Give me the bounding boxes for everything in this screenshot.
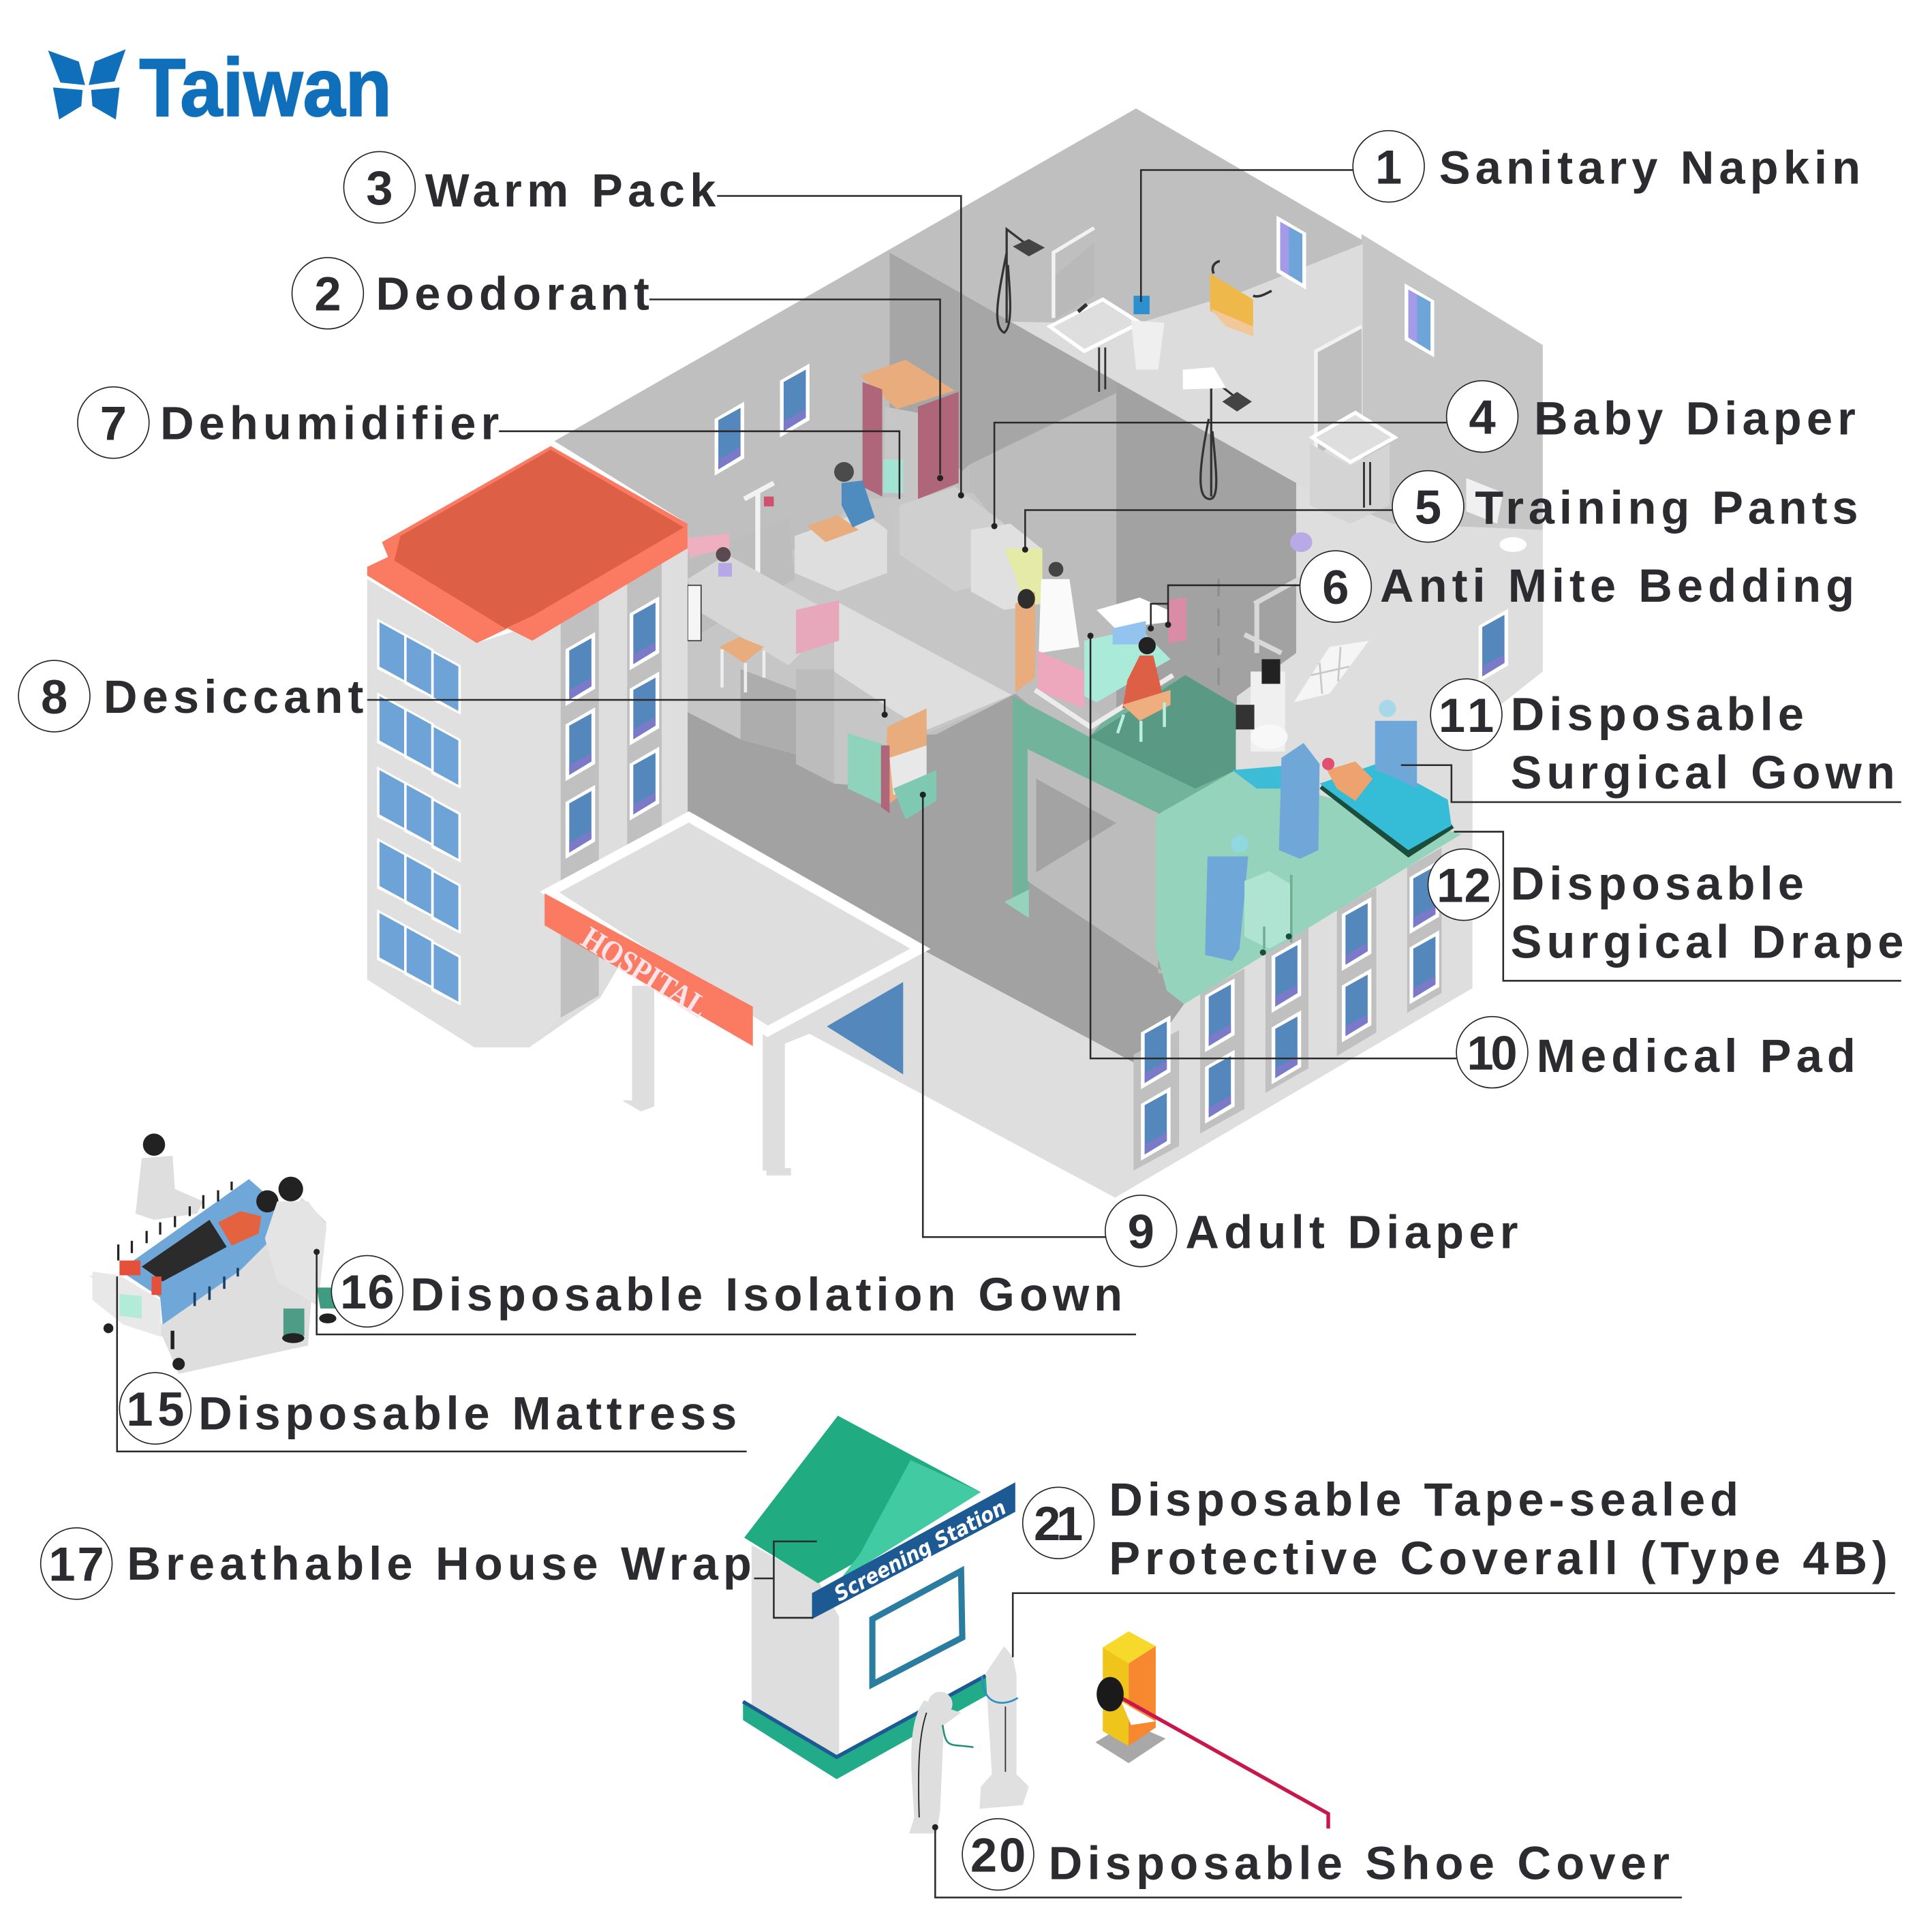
callout 7: Dehumidifier (78, 387, 900, 499)
nurse gown (136, 1156, 203, 1220)
number badge: 21 (1034, 1497, 1083, 1550)
leader line (923, 796, 1107, 1237)
sink two (1310, 444, 1390, 523)
callout 16: Disposable Isolation Gown (313, 1248, 1136, 1334)
label text: Disposable (1511, 688, 1804, 740)
door frame (1028, 749, 1165, 973)
shower one (997, 229, 1032, 333)
IV stand (744, 483, 773, 579)
exterior lower wall (767, 834, 1473, 1197)
instrument table (1232, 764, 1313, 788)
leader line (317, 1253, 1136, 1334)
callout 15: Disposable Mattress (117, 1276, 747, 1452)
patient torso (218, 1211, 261, 1246)
surgeon B (1379, 700, 1396, 717)
illustration: bathroom fixtures (997, 229, 1527, 690)
maternity bed (1015, 592, 1035, 692)
callout 5: Training Pants (1022, 471, 1858, 553)
number badge (1430, 679, 1502, 750)
toilet two (1467, 478, 1503, 523)
illustration: ward rooms with furniture and people (684, 360, 1186, 819)
number badge (1447, 381, 1518, 453)
barrier arm (1121, 1698, 1328, 1828)
illustration: stretcher scene (89, 1133, 337, 1374)
canopy roof (549, 817, 921, 1031)
number badge: 7 (100, 396, 127, 450)
label text: Adult Diaper (1185, 1206, 1518, 1259)
monitors (1251, 671, 1285, 752)
leader line (367, 700, 885, 715)
number badge (1353, 131, 1424, 202)
ceiling arm (1244, 577, 1304, 653)
label text: Disposable Mattress (198, 1387, 737, 1439)
booth base (743, 1676, 996, 1779)
floor and gowns (89, 1197, 326, 1374)
leader line (649, 299, 940, 474)
callout 12: Disposable Surgical Drape: Surgical Drape (1511, 916, 1903, 968)
leader line (1454, 831, 1901, 981)
number badge: 10 (1467, 1026, 1518, 1079)
barrier gap (1121, 1702, 1156, 1725)
worker in coverall right (979, 1646, 1029, 1809)
label text: Deodorant (375, 268, 649, 320)
worker in coverall left (909, 1700, 961, 1833)
number badge: 11 (1439, 688, 1494, 742)
illustration: operating room (1205, 641, 1454, 961)
tower left windows (377, 619, 461, 1005)
number badge (1428, 849, 1499, 921)
wardrobe curtains (863, 382, 883, 497)
callout 21: Disposable Tape-sealed Protective Coverall (Type 4B): Protective Coverall (Type 4B) (1109, 1532, 1888, 1584)
upper bathroom floor and divider (1011, 244, 1363, 523)
callout 10: Medical Pad (1088, 632, 1856, 1088)
barrier post (1103, 1631, 1156, 1663)
towel (1210, 273, 1253, 337)
callout 8: Desiccant (18, 660, 888, 732)
dark partition walls (889, 253, 1116, 471)
number badge: 20 (970, 1828, 1026, 1882)
leader line (499, 431, 900, 499)
surgeon C (1231, 835, 1248, 853)
back wall windows (715, 215, 1435, 476)
operating table (1319, 784, 1454, 857)
number badge: 9 (1128, 1205, 1154, 1259)
sanitary products and toilet (1133, 296, 1150, 314)
patient bed left (688, 555, 838, 665)
barrier base (1095, 1723, 1165, 1763)
illustration: hospital canopy (545, 817, 921, 1176)
building columns (1133, 848, 1441, 1171)
number badge: 1 (1375, 140, 1402, 194)
entrance door (827, 982, 903, 1075)
leader line (754, 1542, 817, 1618)
shower two (1201, 378, 1240, 499)
number badge (78, 387, 149, 459)
patient legs (142, 1220, 227, 1281)
booth left wall (752, 1545, 839, 1755)
number badge: 17 (48, 1537, 104, 1591)
leader line (1401, 765, 1901, 802)
bed end and legs (93, 1272, 162, 1337)
number badge (1456, 1017, 1528, 1088)
label text: Disposable (1511, 857, 1804, 910)
callout 4: Baby Diaper (992, 381, 1856, 530)
number badge (18, 660, 90, 732)
logo: Taiwan (48, 41, 392, 134)
number badge (343, 151, 415, 223)
callout 3: Warm Pack (343, 151, 964, 498)
number badge: 16 (340, 1265, 395, 1319)
person with blue shirt (834, 462, 854, 482)
number badge (1105, 1195, 1177, 1267)
nurse head (143, 1133, 165, 1156)
leader line (994, 423, 1447, 523)
illustration: screening station: Screening Station (830, 1495, 1010, 1607)
roof (367, 446, 688, 643)
wardrobe top (860, 360, 955, 409)
label text: Training Pants (1475, 481, 1858, 534)
illustration: screening station (743, 1415, 1328, 1833)
leader line (1013, 1593, 1895, 1657)
callout 21: Disposable Tape-sealed Protective Coverall (Type 4B) (1013, 1473, 1895, 1657)
sink one (1049, 299, 1139, 351)
number badge: 4 (1469, 390, 1496, 444)
patient (1327, 761, 1373, 801)
booth roof (744, 1415, 981, 1583)
leader line (1025, 510, 1392, 549)
surgeon A (1279, 743, 1319, 859)
callout 9: Adult Diaper (920, 792, 1518, 1267)
leader line (117, 1276, 747, 1452)
illustration: hospital tower (367, 446, 688, 1047)
label text: Baby Diaper (1534, 392, 1856, 444)
lower closet (848, 733, 887, 807)
light lower right wall of upper storey (1233, 483, 1543, 838)
number badge: 6 (1322, 560, 1349, 614)
bed rails (119, 1182, 232, 1261)
label text: Breathable House Wrap (127, 1537, 752, 1590)
illustration: main hospital building cutaway (555, 108, 1543, 1197)
callout 2: Deodorant (292, 258, 943, 481)
woman in red with chair (1139, 637, 1156, 654)
number badge (41, 1528, 112, 1599)
label text: Medical Pad (1537, 1030, 1856, 1082)
number badge: 12 (1437, 858, 1491, 912)
label text: Desiccant (104, 671, 363, 723)
trolley (1244, 871, 1291, 949)
number badge: 3 (366, 161, 393, 215)
number badge (962, 1819, 1034, 1890)
upper back walls (555, 108, 1543, 863)
tower left face (367, 579, 561, 1047)
label text: Anti Mite Bedding (1380, 559, 1854, 612)
label text: Dehumidifier (160, 397, 499, 450)
tower right face (531, 542, 688, 1046)
number badge (1023, 1487, 1094, 1559)
label text: Sanitary Napkin (1439, 141, 1860, 194)
number badge (1300, 551, 1371, 622)
tower right windows (566, 596, 659, 859)
leader line (717, 196, 961, 493)
callout 17: Breathable House Wrap (41, 1528, 817, 1618)
label text: Warm Pack (425, 164, 716, 217)
callout 12: Disposable Surgical Drape (1428, 831, 1903, 981)
bed frame (1035, 675, 1173, 727)
number badge: 15 (126, 1382, 184, 1436)
number badge: 5 (1415, 480, 1441, 534)
leader line (935, 1827, 1682, 1897)
leader line (1090, 637, 1456, 1058)
tower columns (561, 601, 599, 1017)
canopy columns (632, 985, 654, 1103)
lower dark wall (688, 694, 1184, 1066)
label text: Disposable Shoe Cover (1049, 1837, 1670, 1889)
leader line (1151, 585, 1301, 628)
stool (720, 637, 764, 663)
callout 11: Disposable Surgical Gown (1401, 679, 1901, 802)
foot cover (119, 1261, 140, 1275)
green floor of ward (1013, 675, 1236, 912)
exterior windows (1141, 609, 1508, 1161)
number badge (292, 258, 363, 329)
callout 1: Sanitary Napkin (1141, 131, 1860, 302)
mid floor (688, 493, 1041, 739)
icon: butterfly mark (48, 49, 125, 119)
illustration: hospital canopy: HOSPITAL (575, 920, 714, 1025)
surgical lamp (1293, 641, 1369, 703)
callout 11: Disposable Surgical Gown: Surgical Gown (1511, 746, 1895, 799)
number badge: 2 (314, 267, 341, 321)
number badge (331, 1255, 403, 1327)
callout 20: Disposable Shoe Cover (932, 1819, 1682, 1897)
table with baby (795, 511, 887, 592)
cabinets (900, 487, 1005, 592)
doctor trousers and shoes (283, 1308, 305, 1336)
number badge (1392, 471, 1464, 542)
surgery room floor (1156, 771, 1461, 1005)
HOSPITAL sign (545, 893, 753, 1046)
barrier light (1097, 1677, 1124, 1711)
booth window (872, 1571, 962, 1685)
logo wordmark: Taiwan (139, 41, 392, 134)
mattress (119, 1179, 277, 1325)
number badge: 8 (41, 670, 67, 724)
label text: Disposable Isolation Gown (410, 1268, 1122, 1321)
number badge (119, 1373, 191, 1444)
label text: Disposable Tape-sealed (1109, 1473, 1738, 1526)
doctor (265, 1201, 326, 1306)
leader line (1141, 170, 1353, 302)
sign (812, 1482, 1015, 1619)
callout 6: Anti Mite Bedding (1148, 551, 1854, 632)
